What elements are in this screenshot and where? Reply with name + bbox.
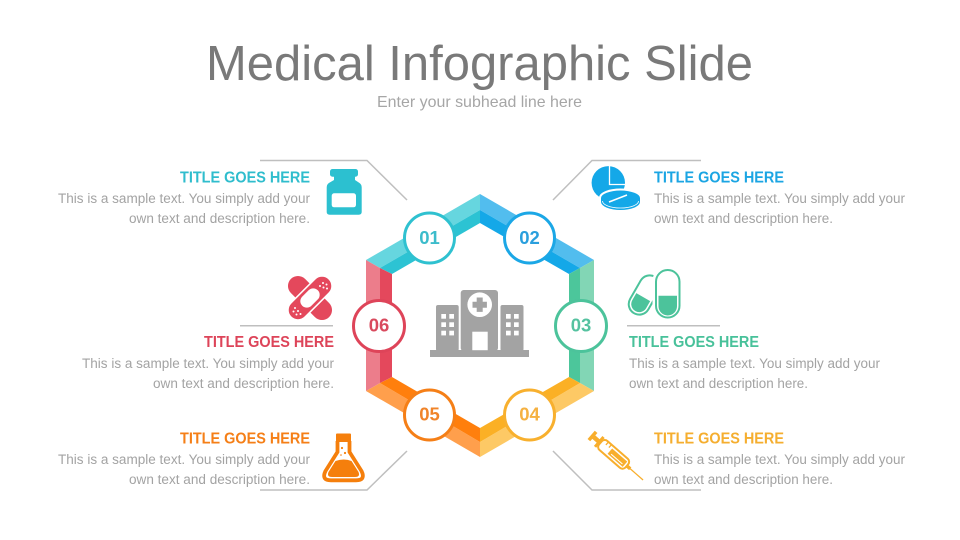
badge 02: 02 [519,227,540,248]
panel: item 01 [58,160,407,226]
badge 03 [556,300,606,352]
subhead: Enter your subhead line here [377,94,582,111]
icon: capsules [625,266,683,322]
hexagon diagram [354,194,606,457]
badge 01 [404,213,454,263]
icon: hospital [430,290,529,357]
icon: bandage [284,272,336,324]
icon: flask [324,434,363,480]
segment 05 [366,377,480,457]
heading: TITLE GOES HERE [204,334,334,351]
panel: item 02 [553,160,906,226]
badge 04: 04 [519,404,540,425]
panel: item 03 [625,266,881,391]
segment 01 [366,194,480,274]
heading: TITLE GOES HERE [180,430,310,447]
segment 02 [480,194,594,274]
badge 03: 03 [571,315,591,336]
badge 01: 01 [419,227,440,248]
description: This is a sample text. You simply add your [58,452,311,467]
heading: TITLE GOES HERE [654,430,784,447]
description: own text and description here. [629,376,808,391]
badge 02 [504,213,554,263]
icon: syringe [588,431,647,485]
description: own text and description here. [153,376,334,391]
description: own text and description here. [654,211,833,226]
heading: TITLE GOES HERE [180,169,310,186]
icon: pie chart and pill [592,165,640,210]
title: Medical Infographic Slide [206,37,753,91]
badge 04 [504,390,554,440]
segment 04 [480,377,594,457]
description: This is a sample text. You simply add your [654,452,906,467]
panel: item 05 [58,430,407,490]
description: own text and description here. [654,472,833,487]
heading: TITLE GOES HERE [654,169,784,186]
badge 06 [354,300,404,352]
description: This is a sample text. You simply add your [629,356,881,371]
description: own text and description here. [129,472,310,487]
segment 03 [569,260,594,391]
description: own text and description here. [129,211,310,226]
panel: item 06 [82,272,336,391]
icon: medicine bottle [327,169,362,215]
badge 06: 06 [369,315,389,336]
description: This is a sample text. You simply add your [654,191,906,206]
description: This is a sample text. You simply add your [58,191,311,206]
description: This is a sample text. You simply add your [82,356,335,371]
badge 05: 05 [419,404,440,425]
segment 06 [366,260,392,391]
panel: item 04 [553,430,906,490]
heading: TITLE GOES HERE [629,334,759,351]
badge 05 [404,390,454,440]
